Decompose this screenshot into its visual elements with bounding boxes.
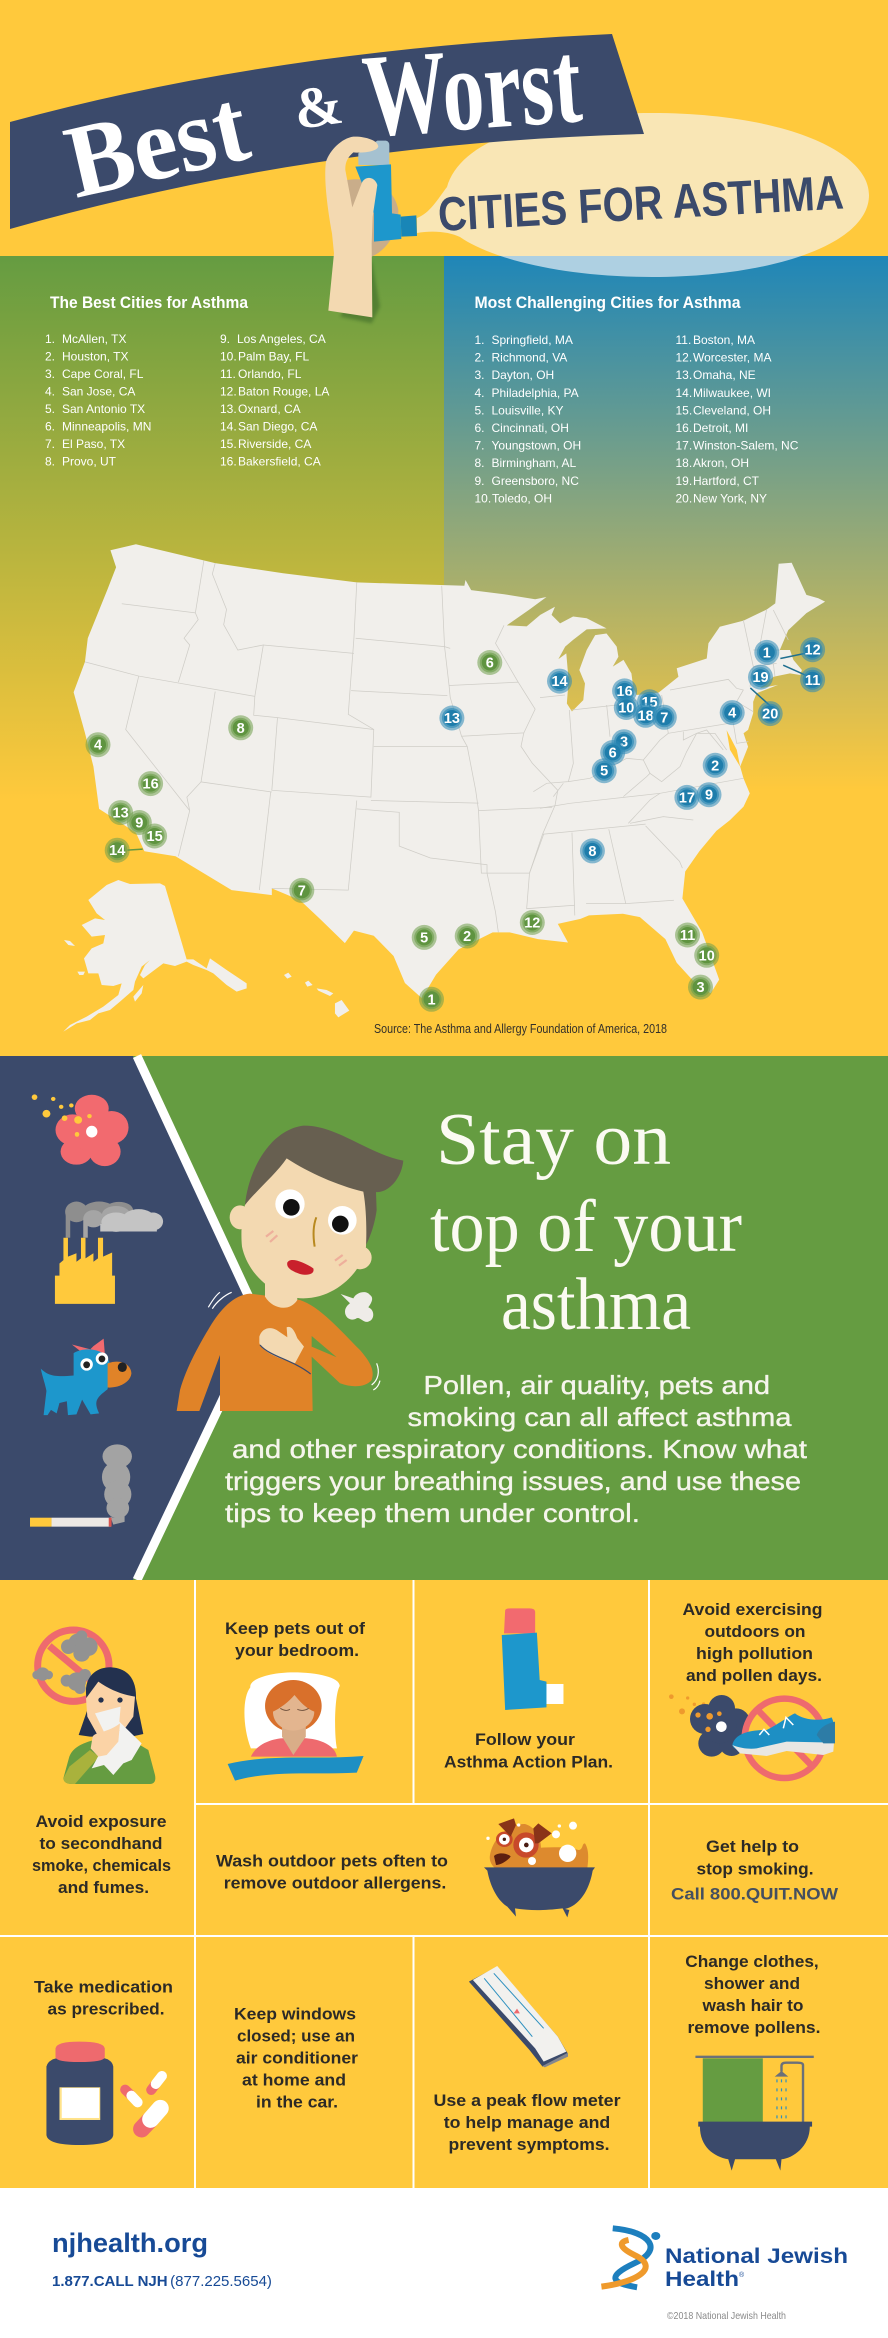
- icon: hand holding inhaler: [325, 137, 417, 323]
- tip text: take medication: [34, 1978, 173, 2018]
- tip text: avoid exposure: Avoid exposure: [36, 1812, 166, 1831]
- closed eyes: [280, 1708, 309, 1710]
- map markers: best cities (green): 4: [94, 738, 102, 754]
- tip text: avoid exposure: [32, 1812, 171, 1897]
- eyes: [499, 1834, 534, 1852]
- logo: National Jewish Health: ®: [739, 2271, 745, 2279]
- challenging list column 1: Birmingham, AL: [492, 456, 577, 470]
- bubbles: [486, 1822, 577, 1865]
- map markers: best cities (green): 14: [109, 843, 125, 859]
- northeastern state borders: [533, 609, 788, 823]
- map markers: challenging cities (blue): 13: [444, 711, 460, 727]
- map markers: challenging cities (blue): 2: [711, 758, 719, 774]
- challenging list column 2: Hartford, CT: [693, 474, 760, 488]
- eyes: [98, 1697, 123, 1703]
- icon: medicine bottle and pills: [46, 2042, 162, 2145]
- intro paragraph: triggers your breathing issues, and use these: [225, 1466, 801, 1496]
- map markers: challenging cities (blue): [439, 637, 825, 863]
- icon: man clutching chest: [177, 1126, 403, 1411]
- map markers: best cities (green): 12: [524, 916, 540, 932]
- map markers: best cities (green): 16: [143, 777, 159, 793]
- tip text: avoid exercising: Avoid exercising: [682, 1600, 822, 1619]
- best cities list column 1: 2.: [45, 350, 55, 364]
- challenging list column 1: 6.: [474, 421, 485, 435]
- tip text: avoid exposure: to secondhand: [40, 1834, 162, 1853]
- shoulders: [251, 1738, 337, 1757]
- best cities list column 2: San Diego, CA: [238, 420, 317, 434]
- best cities list column 1: 3.: [45, 367, 55, 381]
- best cities list column 1: Provo, UT: [62, 454, 117, 468]
- challenging list column 2: 15.: [676, 403, 692, 417]
- tips grid white dividers: [0, 1580, 888, 2188]
- challenging list column 1: 1.: [474, 333, 485, 347]
- challenging list column 1: 2.: [474, 351, 485, 365]
- challenging list column 1: Toledo, OH: [492, 491, 552, 505]
- icon: pollen flower: [32, 1094, 129, 1166]
- tip text: avoid exposure: and fumes.: [58, 1878, 149, 1897]
- ears: [498, 1818, 552, 1843]
- challenging list column 2: 11.: [676, 333, 691, 347]
- tip text: avoid exposure: smoke, chemicals: [32, 1856, 171, 1875]
- challenging list column 2: Omaha, NE: [693, 368, 756, 382]
- map markers: challenging cities (blue): 1: [763, 645, 771, 661]
- Hawaii: [284, 973, 349, 1017]
- inhaler nozzle: [401, 215, 417, 237]
- tip text: wash outdoor pets: remove outdoor allergens.: [224, 1874, 446, 1892]
- dark flower: [690, 1695, 750, 1757]
- panel: tips grid background: [0, 1580, 888, 2188]
- map markers: challenging cities (blue): 17: [679, 790, 695, 806]
- challenging list column 2: 12.: [676, 351, 692, 365]
- US map: [63, 544, 825, 1032]
- challenging list column 1: Youngstown, OH: [492, 439, 581, 453]
- best cities list column 1: McAllen, TX: [62, 332, 126, 346]
- intro paragraph: Pollen, air quality, pets and: [424, 1370, 770, 1400]
- heading: Stay on top of your asthma: [430, 1099, 742, 1346]
- map markers: best cities (green): 11: [680, 928, 695, 944]
- icon: pollen flower and running shoe with no sign: [669, 1694, 835, 1778]
- Alaska: [63, 880, 247, 1032]
- eyes: [275, 1189, 357, 1235]
- tip text: wash outdoor pets: Wash outdoor pets often to: [216, 1852, 448, 1870]
- contiguous states: [74, 544, 825, 998]
- challenging list column 1: Cincinnati, OH: [492, 421, 569, 435]
- intro paragraph: [225, 1370, 808, 1528]
- map markers: challenging cities (blue): 6: [609, 746, 617, 762]
- challenging list column 2: 14.: [676, 386, 692, 400]
- tip text: asthma action plan: [444, 1730, 613, 1772]
- map markers: challenging cities (blue): 20: [762, 707, 778, 723]
- map markers: best cities (green): 3: [696, 980, 705, 996]
- face: [241, 1158, 366, 1298]
- icon: asthma inhaler: [502, 1608, 563, 1710]
- map markers: challenging cities (blue): 14: [551, 674, 568, 690]
- face: [273, 1695, 314, 1731]
- tip text: peak flow meter: [434, 2091, 621, 2154]
- tip text: peak flow meter: prevent symptoms.: [448, 2135, 610, 2154]
- face: [86, 1682, 135, 1740]
- tip text: take medication: Take medication: [34, 1978, 173, 1996]
- speech bubble: [417, 113, 869, 277]
- Chesapeake bay: [727, 730, 740, 767]
- chevron white edge: [137, 1056, 260, 1580]
- dog body: [527, 1843, 588, 1870]
- best cities list column 2: Los Angeles, CA: [237, 332, 326, 346]
- best cities list column 1: 1.: [45, 332, 55, 346]
- map markers: challenging cities (blue): 7: [660, 710, 668, 726]
- challenging list column 2: 17.: [676, 439, 692, 453]
- map markers: challenging cities (blue): 16: [617, 684, 633, 700]
- title banner: Best & Worst: [10, 16, 644, 229]
- heading: Stay on top of your asthma: asthma: [501, 1264, 691, 1346]
- best cities list column 1: 7.: [45, 437, 55, 451]
- puff of breath: [341, 1292, 373, 1322]
- map markers: best cities (green): 7: [298, 883, 306, 899]
- map markers: best cities (green): 2: [463, 929, 471, 945]
- challenging list column 1: 8.: [474, 456, 485, 470]
- map markers: best cities (green): [86, 650, 719, 1012]
- logo wordmark: National Jewish: [665, 2245, 848, 2268]
- map markers: challenging cities (blue): 10: [618, 700, 634, 716]
- best cities list column 2: [220, 332, 329, 468]
- challenging list column 1: 5.: [474, 403, 485, 417]
- best cities list column 2: 10.: [220, 350, 237, 364]
- neck: [265, 1280, 297, 1308]
- best cities list column 1: El Paso, TX: [62, 437, 125, 451]
- icon: woman sleeping on pillow: [228, 1672, 364, 1781]
- heading: Stay on top of your asthma: top of your: [430, 1186, 742, 1268]
- tip text: keep windows closed: in the car.: [256, 2092, 338, 2112]
- tip text: change clothes: remove pollens.: [688, 2018, 820, 2037]
- map markers: challenging cities (blue): 9: [705, 788, 713, 804]
- challenging list column 2: Boston, MA: [693, 333, 755, 347]
- best cities list column 2: 11.: [220, 367, 236, 381]
- panel: footer: [0, 2188, 888, 2338]
- source note: Source: The Asthma and Allergy Foundation of America, 2018: [374, 1022, 667, 1036]
- icon: factory with smoke: [55, 1202, 163, 1304]
- tip text: change clothes: [685, 1952, 820, 2037]
- western and central state borders: [85, 560, 682, 932]
- map markers: challenging cities (blue): 5: [600, 764, 608, 780]
- map markers: best cities (green): 5: [420, 930, 428, 946]
- best cities heading: The Best Cities for Asthma: [50, 293, 248, 312]
- best cities list column 1: Houston, TX: [62, 350, 128, 364]
- no sign: [38, 1630, 109, 1701]
- challenging list column 1: 7.: [474, 439, 485, 453]
- tip text: avoid exercising: high pollution: [696, 1644, 813, 1663]
- best cities list column 2: 14.: [220, 420, 237, 434]
- challenging list column 2: Detroit, MI: [693, 421, 748, 435]
- icon: woman with tissue and no-smoke sign: [32, 1630, 155, 1784]
- best cities list column 1: Cape Coral, FL: [62, 367, 144, 381]
- no sign: [745, 1699, 824, 1778]
- map markers: best cities (green): 8: [237, 721, 245, 737]
- smoke clouds: [32, 1630, 98, 1694]
- dog head: [490, 1824, 541, 1874]
- best cities list column 1: 5.: [45, 402, 55, 416]
- map markers: challenging cities (blue): 3: [620, 735, 628, 751]
- best cities list column 1: 6.: [45, 420, 55, 434]
- tissue: [92, 1707, 142, 1775]
- title banner: Best & Worst: &: [290, 71, 347, 142]
- best cities list column 2: 13.: [220, 402, 237, 416]
- heading: Stay on top of your asthma: Stay on: [436, 1099, 671, 1181]
- cheeks: [266, 1231, 347, 1266]
- challenging list column 2: 19.: [676, 474, 692, 488]
- website link: njhealth.org: [52, 2228, 208, 2258]
- challenging list column 2: Akron, OH: [693, 456, 749, 470]
- sneaker: [732, 1713, 835, 1752]
- logo: National Jewish Health: Health: [665, 2268, 739, 2291]
- challenging list column 2: [676, 333, 799, 505]
- nose: [314, 1217, 316, 1247]
- panel: most challenging cities gradient background: [444, 256, 888, 796]
- map markers: challenging cities (blue): 8: [588, 844, 596, 860]
- neck: [282, 1723, 306, 1755]
- tip text: keep windows closed: at home and: [242, 2070, 346, 2090]
- best cities list column 2: Orlando, FL: [238, 367, 302, 381]
- inhaler body: [355, 164, 401, 242]
- challenging list column 1: Louisville, KY: [492, 403, 564, 417]
- challenging list column 2: Milwaukee, WI: [693, 386, 771, 400]
- tip text: peak flow meter: to help manage and: [444, 2113, 610, 2132]
- challenging list column 2: 20.: [676, 491, 692, 505]
- best cities list column 2: Bakersfield, CA: [238, 454, 321, 468]
- challenging list column 1: Greensboro, NC: [492, 474, 579, 488]
- map markers: challenging cities (blue): 11: [805, 673, 820, 689]
- best cities list column 2: 16.: [220, 454, 237, 468]
- panel: triggers navy chevron: [0, 1056, 258, 1580]
- tip text: keep pets out: your bedroom.: [235, 1641, 359, 1660]
- best cities list column 1: Minneapolis, MN: [62, 420, 151, 434]
- map markers: challenging cities (blue): 18: [638, 708, 654, 724]
- wrist shadow: [340, 260, 380, 323]
- best cities list column 1: [45, 332, 151, 468]
- title banner: Best & Worst: Worst: [359, 16, 585, 162]
- best cities list column 2: Baton Rouge, LA: [238, 384, 329, 398]
- helix mark: [601, 2228, 660, 2287]
- panel: best cities gradient background: [0, 256, 444, 816]
- tip text: avoid exercising: [682, 1600, 822, 1685]
- hair back: [79, 1667, 143, 1737]
- phone number: 1.877.CALL NJH: [52, 2273, 168, 2290]
- challenging list column 1: Dayton, OH: [492, 368, 554, 382]
- best cities list column 2: Riverside, CA: [238, 437, 311, 451]
- tip text: take medication: as prescribed.: [48, 2000, 164, 2018]
- best cities list column 2: Oxnard, CA: [238, 402, 301, 416]
- palm behind inhaler: [347, 179, 398, 257]
- best cities list column 1: 4.: [45, 384, 55, 398]
- map markers: best cities (green): 10: [699, 948, 715, 964]
- pillow: [244, 1672, 340, 1748]
- map markers: challenging cities (blue): 12: [805, 643, 821, 659]
- tip text: peak flow meter: Use a peak flow meter: [434, 2091, 621, 2110]
- challenging list column 1: 4.: [474, 386, 485, 400]
- challenging list column 1: Springfield, MA: [492, 333, 573, 347]
- map markers: best cities (green): 6: [486, 656, 494, 672]
- map markers: challenging cities (blue): 19: [752, 670, 769, 686]
- tip text: change clothes: wash hair to: [701, 1996, 804, 2015]
- challenging list column 1: Richmond, VA: [492, 351, 567, 365]
- best cities list column 1: San Jose, CA: [62, 384, 135, 398]
- map markers: best cities (green): 1: [427, 992, 436, 1008]
- challenging list column 1: [474, 333, 581, 505]
- tip text: asthma action plan: Follow your: [475, 1730, 575, 1749]
- blanket: [228, 1756, 364, 1781]
- challenging list column 1: 3.: [474, 368, 485, 382]
- challenging list column 2: 13.: [676, 368, 692, 382]
- connector lines: [127, 652, 810, 850]
- challenging list column 2: 16.: [676, 421, 692, 435]
- sweater: [63, 1741, 155, 1784]
- best cities list column 2: 12.: [220, 384, 237, 398]
- tip text: keep windows closed: Keep windows: [234, 2004, 356, 2024]
- copyright: ©2018 National Jewish Health: [667, 2310, 786, 2322]
- phone number: (877.225.5654): [166, 2273, 272, 2290]
- tip text: keep pets out: Keep pets out of: [225, 1619, 365, 1638]
- tip text: wash outdoor pets: [216, 1852, 448, 1892]
- challenging list column 2: Winston-Salem, NC: [693, 439, 799, 453]
- map markers: challenging cities (blue): 4: [728, 706, 736, 722]
- hair: [265, 1680, 322, 1732]
- challenging list column 1: 9.: [474, 474, 485, 488]
- tip text: change clothes: shower and: [704, 1974, 800, 1993]
- challenging list column 2: Worcester, MA: [693, 351, 771, 365]
- hand: [325, 137, 378, 317]
- map markers: best cities (green): 13: [113, 806, 129, 822]
- title banner: Best & Worst: Best: [55, 67, 259, 220]
- tip text: help to stop smoking: Get help to: [706, 1837, 799, 1856]
- hand: [91, 1723, 120, 1757]
- motion lines: [208, 1292, 380, 1390]
- mouth: [287, 1260, 314, 1275]
- tip text: keep windows closed: [234, 2004, 358, 2112]
- yellow page background: [0, 0, 888, 1060]
- challenging list column 1: 10.: [474, 491, 491, 505]
- intro paragraph: smoking can all affect asthma: [408, 1402, 792, 1432]
- challenging list column 2: New York, NY: [693, 491, 767, 505]
- best cities list column 2: Palm Bay, FL: [238, 350, 309, 364]
- tip text: avoid exercising: outdoors on: [704, 1622, 806, 1641]
- tip text: keep windows closed: air conditioner: [236, 2048, 358, 2068]
- best cities list column 2: 9.: [220, 332, 230, 346]
- bathtub: [484, 1867, 595, 1917]
- best cities list column 1: 8.: [45, 454, 55, 468]
- tip text: help to stop smoking: stop smoking.: [696, 1860, 814, 1878]
- best cities list column 1: San Antonio TX: [62, 402, 145, 416]
- orange pollen dots: [669, 1694, 705, 1714]
- torso: [177, 1294, 373, 1411]
- intro paragraph: and other respiratory conditions. Know what: [232, 1434, 808, 1464]
- icon: peak flow meter: [469, 1966, 568, 2067]
- logo: National Jewish Health: [601, 2228, 848, 2291]
- hand on chest: [259, 1327, 304, 1363]
- tip text: keep pets out: [225, 1619, 365, 1660]
- map markers: best cities (green): 9: [135, 816, 143, 832]
- quit line: Call 800.QUIT.NOW: [671, 1884, 839, 1904]
- intro paragraph: tips to keep them under control.: [225, 1498, 640, 1528]
- map markers: challenging cities (blue): 15: [641, 695, 658, 711]
- tip text: help to stop smoking: [671, 1837, 839, 1904]
- icon: shower and bathtub: [695, 2056, 814, 2171]
- hair: [245, 1126, 403, 1247]
- tip text: avoid exercising: and pollen days.: [686, 1666, 822, 1685]
- panel: stay on top green band: [0, 1056, 888, 1580]
- challenging list column 2: 18.: [676, 456, 692, 470]
- icon: cigarette with smoke: [30, 1444, 132, 1527]
- tip text: asthma action plan: Asthma Action Plan.: [444, 1752, 613, 1772]
- ears: [230, 1205, 372, 1269]
- tip text: change clothes: Change clothes,: [685, 1952, 819, 1971]
- icon: blue dog: [41, 1339, 131, 1415]
- nose: [494, 1853, 511, 1865]
- most challenging heading: Most Challenging Cities for Asthma: [474, 293, 741, 312]
- tip text: keep windows closed: closed; use an: [237, 2026, 355, 2046]
- icon: dog in bathtub: [484, 1818, 595, 1917]
- map markers: best cities (green): 15: [147, 829, 163, 845]
- inhaler canister: [358, 141, 389, 165]
- challenging list column 2: Cleveland, OH: [693, 403, 771, 417]
- challenging list column 1: Philadelphia, PA: [492, 386, 579, 400]
- best cities list column 2: 15.: [220, 437, 237, 451]
